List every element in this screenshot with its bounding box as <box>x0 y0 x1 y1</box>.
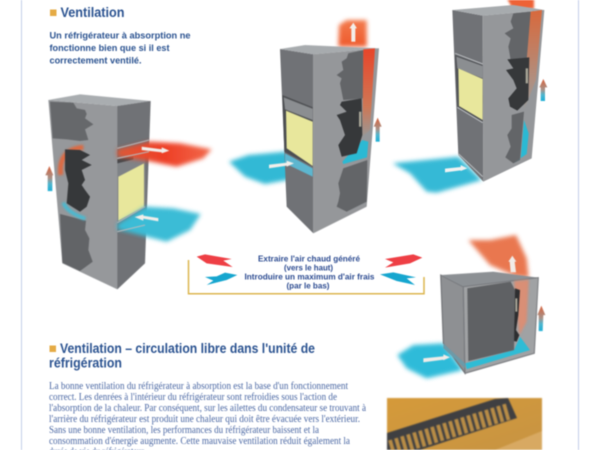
body text: Sans une bonne ventilation, les performances du réfrigérateur baissent et la <box>49 425 320 436</box>
blue plume <box>393 157 482 193</box>
heading: Ventilation circulation libre <box>49 341 315 370</box>
red plume <box>338 20 367 47</box>
heading: Ventilation circulation libre: Ventilation – circulation libre dans l'unité de <box>60 341 315 356</box>
intro text: fonctionne bien que si il est <box>50 43 170 53</box>
cabinet top <box>280 45 379 54</box>
yellow door <box>458 68 483 120</box>
red plume <box>468 235 529 278</box>
blue plume <box>229 152 313 184</box>
control strip <box>117 156 133 163</box>
cabinet top <box>48 94 151 106</box>
cabinet left face <box>452 10 483 182</box>
cutaway lower panel <box>60 214 93 271</box>
upper cutaway <box>505 12 531 60</box>
body text: correct. Les denrées à l'intérieur du réfrigérateur sont refroidies sous l'action de <box>49 392 338 403</box>
front door recess <box>117 147 146 223</box>
cutaway upper panel <box>50 102 93 141</box>
intro text <box>50 30 190 66</box>
yellow door <box>286 111 313 166</box>
cabinet top <box>452 5 544 16</box>
small rising arrow <box>537 306 545 331</box>
vent frame lines <box>117 140 149 232</box>
upper cutaway <box>337 50 363 100</box>
blue lower lip <box>443 343 465 368</box>
heading: Ventilation circulation libre: réfrigération <box>49 355 122 370</box>
door recess <box>455 55 483 122</box>
blue vent band <box>285 153 313 177</box>
diagram: fridge with roof vent <box>229 20 382 233</box>
legend callout: (par le bas) <box>286 280 330 290</box>
white arrows <box>423 256 516 362</box>
body text <box>49 381 367 450</box>
blue plume <box>117 207 201 242</box>
grille frame <box>387 398 517 450</box>
legend callout <box>188 254 424 294</box>
grille slots <box>390 404 508 450</box>
cabinet left face <box>280 49 313 233</box>
diagram: fridge with front vents <box>45 94 212 289</box>
photo: ventilation grille <box>387 398 542 450</box>
body text: consommation d'énergie augmente. Cette mauvaise ventilation réduit également la <box>49 436 351 447</box>
red strip <box>362 48 375 137</box>
intro text: Un réfrigérateur à absorption ne <box>50 30 190 40</box>
legend text: Extraire l'air chaud généré <box>258 254 360 264</box>
black unit <box>514 288 520 342</box>
blue floor <box>465 337 530 369</box>
legend callout: (vers le haut) <box>284 262 333 272</box>
absorption unit <box>65 149 92 212</box>
blue plume <box>397 343 463 378</box>
cabinet front face <box>117 101 151 289</box>
cabinet right face <box>313 48 379 233</box>
legend arrows <box>197 254 422 285</box>
right face <box>463 278 538 373</box>
heading: Ventilation: Ventilation <box>60 5 124 20</box>
door recess <box>282 95 313 167</box>
body text: l'absorption de la chaleur. Par conséquent, sur les ailettes du condensateur se trouvant à <box>49 403 367 414</box>
red plume <box>506 0 534 10</box>
top <box>441 272 538 287</box>
red plume <box>117 142 212 167</box>
dark side panel <box>467 282 515 361</box>
lower cutaway <box>337 160 367 212</box>
red strip <box>524 10 542 110</box>
small rising arrow <box>45 166 53 191</box>
lower cutaway <box>505 112 524 163</box>
body text: La bonne ventilation du réfrigérateur à absorption est la base d'un fonctionnement <box>49 381 348 392</box>
absorption unit <box>506 57 529 111</box>
wood background <box>387 398 542 450</box>
orange rear strip <box>514 280 529 335</box>
small rising arrow <box>374 118 382 142</box>
door lines <box>455 53 483 177</box>
legend callout: Introduire un maximum d'air frais <box>244 272 375 282</box>
small rising arrow <box>539 79 547 101</box>
blue strip <box>513 120 529 163</box>
body text: l'arrière du réfrigérateur est produit une chaleur qui doit être évacuée vers l'extérieur. <box>49 414 360 425</box>
yellow door <box>118 163 144 221</box>
bracket <box>188 260 424 294</box>
cabinet right face <box>483 10 544 182</box>
hot air curve <box>60 147 83 175</box>
white arrows <box>135 147 169 221</box>
white arrow <box>445 165 467 172</box>
white arrows <box>269 23 357 168</box>
diagram: fridge with bottom and top rear vents <box>393 0 547 193</box>
absorption unit <box>337 98 362 157</box>
blue strip <box>342 140 368 164</box>
cabinet side face <box>48 100 117 289</box>
diagram: cube unit cutaway <box>397 235 545 378</box>
intro text: correctement ventilé. <box>50 56 142 66</box>
lighter board <box>495 431 542 450</box>
cool air curve <box>63 203 85 219</box>
left face <box>441 275 465 373</box>
